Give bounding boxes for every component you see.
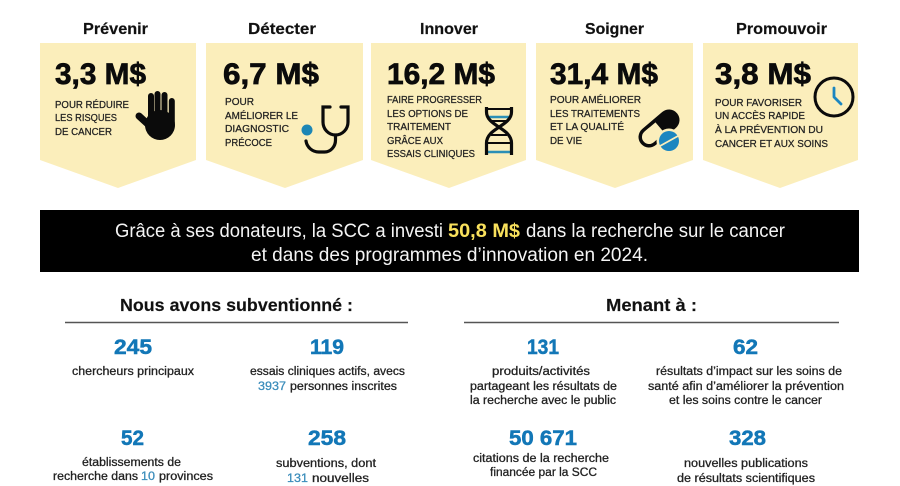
- banner: total invested: [40, 210, 859, 272]
- section: Menant à: [464, 295, 844, 485]
- stat: 62 résultats d'impact: santé afin d’améliorer la prévention: [648, 381, 844, 393]
- text: description: DE VIE: [550, 135, 582, 147]
- amount: 6,7 M$: 6,7 M$: [223, 58, 319, 91]
- text: description: [55, 98, 129, 138]
- text: description: [715, 97, 828, 150]
- stat: 328 publications: [677, 427, 815, 485]
- stat: 52 établissements: provinces: [159, 471, 213, 483]
- text: description: À LA PRÉVENTION DU: [715, 123, 823, 136]
- stat: 62 résultats d'impact: 62: [733, 336, 758, 359]
- stat: 119 essais cliniques: 3937: [258, 381, 286, 393]
- stat: 62 résultats d'impact: et les soins contre le cancer: [669, 395, 822, 407]
- stat: 131 produits/activités: partageant les résultats de: [470, 381, 617, 393]
- text: banner line 1: Grâce à ses donateurs, la SCC a investi: [115, 221, 443, 242]
- text: description: [225, 96, 298, 149]
- text: description: GRÂCE AUX: [387, 134, 443, 147]
- stat: 119 essais cliniques: 119: [310, 336, 344, 359]
- amount: 16,2 M$: 16,2 M$: [387, 58, 495, 91]
- stat: 258 subventions: 258: [308, 427, 346, 450]
- text: description: POUR RÉDUIRE: [55, 98, 129, 111]
- text: description: FAIRE PROGRESSER: [387, 94, 482, 106]
- heading: Menant à: Menant à :: [606, 295, 697, 315]
- panel: Innover: [371, 21, 526, 188]
- text: description: UN ACCÈS RAPIDE: [715, 109, 805, 122]
- text: description: LES RISQUES: [55, 112, 117, 124]
- stat: 258 subventions: subventions, dont: [276, 458, 377, 470]
- text: description: LES TRAITEMENTS: [550, 108, 640, 120]
- stat: 52 établissements: 10: [141, 471, 155, 483]
- icon: clock: [815, 78, 853, 116]
- text: banner line 1: [115, 221, 786, 242]
- stat: 245 chercheurs principaux: [72, 336, 194, 378]
- text: banner line 1: dans la recherche sur le cancer: [526, 221, 786, 242]
- stat: 258 subventions: [276, 427, 377, 485]
- text: description: CANCER ET AUX SOINS: [715, 138, 828, 150]
- text: description: TRAITEMENT: [387, 121, 452, 133]
- text: description: POUR: [225, 96, 254, 108]
- stat: 52 établissements: établissements de: [82, 457, 181, 469]
- shape: yellow pennant: [206, 43, 363, 188]
- stat: 328 publications: 328: [729, 427, 766, 450]
- shape: yellow pennant: [536, 43, 693, 188]
- stat: 52 établissements: 52: [121, 427, 144, 450]
- text: description: POUR AMÉLIORER: [550, 93, 641, 106]
- stat: 50 671 citations: 50 671: [509, 427, 577, 450]
- heading: Nous avons subventionné: Nous avons subventionné :: [120, 295, 353, 315]
- stat: 119 essais cliniques: [250, 336, 405, 393]
- panel: Détecter: [206, 21, 363, 188]
- text: description: ET LA QUALITÉ: [550, 120, 624, 133]
- stat: 245 chercheurs principaux: 245: [114, 336, 152, 359]
- stat: 52 établissements: recherche dans: [53, 471, 138, 483]
- amount: 3,3 M$: 3,3 M$: [55, 58, 146, 91]
- text: description: PRÉCOCE: [225, 136, 272, 149]
- stat: 258 subventions: 131: [287, 473, 308, 485]
- heading: Innover: Innover: [420, 21, 478, 38]
- stat: 328 publications: de résultats scientifiques: [677, 473, 815, 485]
- heading: Promouvoir: Promouvoir: [736, 21, 827, 38]
- stat: 62 résultats d'impact: [648, 336, 844, 407]
- stat: 50 671 citations: [473, 427, 609, 479]
- amount: 3,8 M$: 3,8 M$: [715, 58, 811, 91]
- text: description: [550, 93, 641, 147]
- shape: yellow pennant: [371, 43, 526, 188]
- amount: 31,4 M$: 31,4 M$: [550, 58, 658, 91]
- icon: DNA helix: [486, 107, 512, 155]
- stat: 119 essais cliniques: essais cliniques actifs, avecs: [250, 366, 405, 378]
- text: banner line 2: et dans des programmes d’innovation en 2024.: [251, 245, 648, 266]
- icon: capsule and tablet: [649, 120, 682, 154]
- panel: Prévenir: [40, 21, 196, 188]
- text: description: AMÉLIORER LE: [225, 109, 298, 122]
- section: Nous avons subventionné: [53, 295, 408, 485]
- stat: 131 produits/activités: 131: [527, 336, 559, 359]
- text: description: DE CANCER: [55, 126, 112, 138]
- stat: 131 produits/activités: la recherche avec le public: [470, 395, 616, 407]
- text: description: POUR FAVORISER: [715, 97, 802, 109]
- stat: 50 671 citations: financée par la SCC: [490, 467, 597, 479]
- icon: stethoscope: [302, 107, 348, 152]
- text: description: DIAGNOSTIC: [225, 123, 289, 135]
- stat: 50 671 citations: citations de la recherche: [473, 453, 609, 465]
- text: banner line 1: 50,8 M$: [448, 221, 520, 242]
- text: description: LES OPTIONS DE: [387, 108, 468, 120]
- heading: Soigner: Soigner: [585, 21, 644, 38]
- stat: 62 résultats d'impact: résultats d’impact sur les soins de: [656, 366, 842, 378]
- shape: yellow pennant: [703, 43, 858, 188]
- panel: Promouvoir: [703, 21, 858, 188]
- stat: 131 produits/activités: [470, 336, 617, 407]
- icon: hand: [139, 94, 175, 140]
- shape: yellow pennant: [40, 43, 196, 188]
- stat: 52 établissements: [53, 427, 213, 483]
- text: description: [387, 94, 482, 160]
- text: description: ESSAIS CLINIQUES: [387, 148, 475, 160]
- panel: Soigner: [536, 21, 693, 188]
- stat: 131 produits/activités: produits/activités: [492, 366, 590, 378]
- stat: 328 publications: nouvelles publications: [684, 458, 808, 470]
- stat: 258 subventions: nouvelles: [312, 473, 369, 485]
- stat: 119 essais cliniques: personnes inscrites: [290, 381, 397, 393]
- heading: Prévenir: Prévenir: [83, 21, 148, 38]
- stat: 245 chercheurs principaux: chercheurs principaux: [72, 366, 194, 378]
- heading: Détecter: Détecter: [248, 21, 316, 38]
